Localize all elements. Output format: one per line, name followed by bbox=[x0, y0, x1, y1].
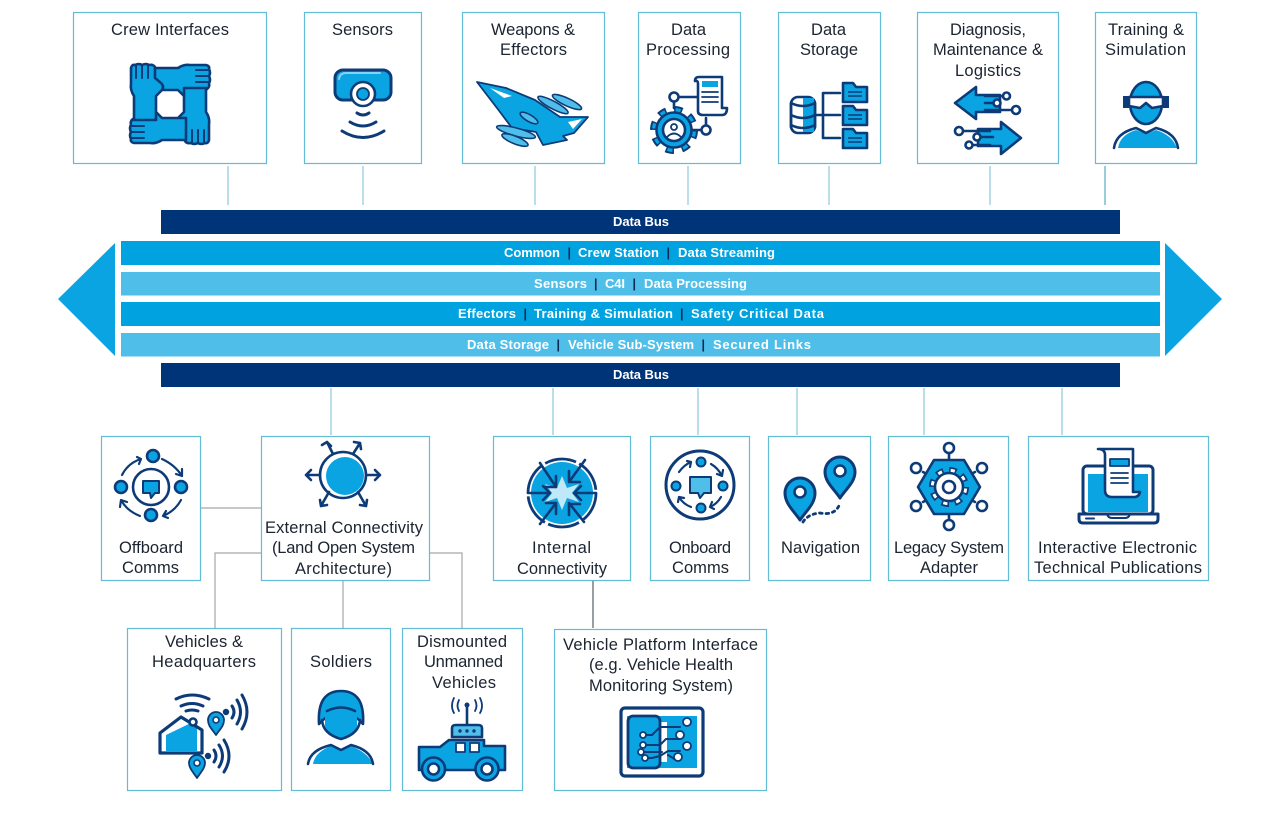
heading: weapons and effectors: Weapons & bbox=[491, 21, 575, 39]
panel: interactive electronic technical publications: Technical Publications bbox=[1034, 559, 1202, 577]
bus band: effectors, training and simulation, safety critical data: | bbox=[680, 307, 684, 321]
heading: offboard comms: Offboard bbox=[119, 539, 183, 557]
bus band: data storage, vehicle sub-system, secured links: Secured Links bbox=[713, 337, 811, 352]
panel: navigation bbox=[768, 436, 870, 580]
icon: person with VR headset bbox=[1114, 82, 1178, 148]
bus band: common, crew station, data streaming: Common bbox=[504, 245, 560, 260]
heading: legacy system adapter: Legacy System bbox=[894, 539, 1004, 557]
bus band: sensors, C4I, data processing: | bbox=[632, 277, 636, 291]
panel: interactive electronic technical publications bbox=[1028, 436, 1208, 580]
panel: diagnosis, maintenance and logistics: Logistics bbox=[955, 62, 1021, 80]
icon: database and folders bbox=[791, 83, 867, 148]
panel: vehicle platform interface: (e.g. Vehicle Health bbox=[589, 656, 733, 674]
panel: offboard comms bbox=[102, 436, 200, 580]
heading: internal connectivity: Internal bbox=[532, 539, 591, 557]
data bus: bottom: Data Bus bbox=[613, 367, 669, 382]
heading: vehicles and headquarters: Vehicles & bbox=[165, 633, 243, 651]
heading: data storage: Data bbox=[811, 21, 847, 39]
panel: dismounted unmanned vehicles: Unmanned bbox=[424, 653, 503, 671]
heading: training and simulation: Training & bbox=[1108, 21, 1184, 39]
panel: diagnosis, maintenance and logistics: Maintenance & bbox=[933, 41, 1043, 59]
connector lines: upper modules to data bus bbox=[228, 166, 1105, 205]
panel: data processing: Processing bbox=[646, 41, 730, 59]
heading: data processing: Data bbox=[671, 21, 707, 39]
bus band: effectors, training and simulation, safety critical data: Training & Simulation bbox=[534, 306, 673, 321]
icon: building with wireless signals and pins bbox=[160, 695, 247, 778]
heading: sensors: Sensors bbox=[332, 21, 393, 39]
bus band: effectors, training and simulation, safety critical data: Effectors bbox=[458, 306, 516, 321]
heading: external connectivity: External Connectivity bbox=[265, 519, 424, 537]
bus band: common, crew station, data streaming: | bbox=[666, 246, 670, 260]
icon: circle with outward arrows bbox=[306, 442, 380, 506]
panel: internal connectivity: Connectivity bbox=[517, 560, 608, 578]
bus band: data storage, vehicle sub-system, secured links: | bbox=[556, 338, 560, 352]
heading: soldiers: Soldiers bbox=[310, 653, 372, 671]
bus band: data storage, vehicle sub-system, secured links bbox=[121, 333, 1160, 356]
data bus: top: Data Bus bbox=[613, 214, 669, 229]
left arrow head bbox=[58, 243, 115, 356]
heading: crew interfaces: Crew Interfaces bbox=[111, 21, 229, 39]
panel: vehicles and headquarters bbox=[128, 628, 282, 790]
icon: segmented circle with inward arrows bbox=[528, 459, 596, 527]
panel: weapons and effectors: Effectors bbox=[500, 41, 567, 59]
right arrow head bbox=[1165, 243, 1222, 356]
panel: training and simulation: Simulation bbox=[1105, 41, 1186, 59]
bus band: sensors, C4I, data processing: | bbox=[594, 277, 598, 291]
data bus: bottom bbox=[161, 363, 1120, 387]
heading: diagnosis, maintenance and logistics: Diagnosis, bbox=[950, 21, 1026, 39]
panel: onboard comms bbox=[650, 436, 750, 580]
bus band: sensors, C4I, data processing: C4I bbox=[605, 276, 625, 291]
panel: dismounted unmanned vehicles: Vehicles bbox=[432, 674, 496, 692]
heading: dismounted unmanned vehicles: Dismounted bbox=[417, 633, 507, 651]
icon: circuit arrows bbox=[955, 87, 1021, 154]
data bus: top bbox=[161, 210, 1120, 234]
panel: offboard comms: Comms bbox=[122, 559, 179, 577]
bus band: common, crew station, data streaming: Crew Station bbox=[578, 245, 659, 260]
icon: offboard communication cycle bbox=[115, 450, 187, 521]
icon: hexagon gear with nodes bbox=[911, 443, 987, 530]
panel: vehicle platform interface bbox=[554, 630, 766, 790]
heading: navigation: Navigation bbox=[781, 539, 860, 557]
heading: onboard comms: Onboard bbox=[669, 539, 731, 557]
icon: sensor with waves bbox=[335, 70, 391, 138]
icon: laptop with document bbox=[1079, 449, 1158, 523]
heading: vehicle platform interface: Vehicle Platform Interface bbox=[563, 636, 758, 654]
icon: gear, person and document bbox=[654, 77, 727, 150]
bus band: effectors, training and simulation, safety critical data bbox=[121, 302, 1160, 326]
panel: onboard comms: Comms bbox=[672, 559, 729, 577]
bus band: sensors, C4I, data processing: Data Processing bbox=[644, 276, 747, 291]
panel: diagnosis, maintenance and logistics bbox=[918, 12, 1058, 164]
panel: dismounted unmanned vehicles bbox=[402, 628, 522, 790]
bus band: data storage, vehicle sub-system, secured links: | bbox=[702, 338, 705, 352]
bus band: data storage, vehicle sub-system, secured links: Vehicle Sub-System bbox=[568, 337, 694, 352]
panel: external connectivity bbox=[262, 436, 430, 580]
panel: legacy system adapter bbox=[888, 436, 1008, 580]
icon: soldier with helmet bbox=[308, 691, 373, 764]
panel: crew interfaces bbox=[74, 12, 266, 164]
heading: interactive electronic technical publications: Interactive Electronic bbox=[1038, 539, 1197, 557]
icon: circuit board bbox=[621, 708, 703, 776]
panel: training and simulation bbox=[1096, 12, 1196, 164]
icon: onboard communication cycle bbox=[666, 451, 734, 519]
bus band: common, crew station, data streaming bbox=[121, 241, 1160, 265]
panel: vehicles and headquarters: Headquarters bbox=[152, 653, 256, 671]
panel: legacy system adapter: Adapter bbox=[920, 559, 978, 577]
icon: location pins with dotted route bbox=[785, 457, 855, 522]
bus band: effectors, training and simulation, safety critical data: | bbox=[524, 307, 527, 321]
connector lines: data bus to lower modules bbox=[331, 388, 1062, 435]
panel: data storage bbox=[778, 12, 880, 164]
bus band: sensors, C4I, data processing bbox=[121, 272, 1160, 296]
panel: data processing bbox=[638, 12, 740, 164]
panel: internal connectivity bbox=[494, 436, 630, 580]
bus band: sensors, C4I, data processing: Sensors bbox=[534, 276, 587, 291]
panel: data storage: Storage bbox=[800, 41, 858, 59]
bus band: common, crew station, data streaming: | bbox=[568, 246, 571, 260]
icon: fighter jet with missiles bbox=[477, 82, 588, 149]
panel: external connectivity: Architecture) bbox=[295, 560, 392, 578]
panel: vehicle platform interface: Monitoring System) bbox=[589, 677, 733, 695]
panel: weapons and effectors bbox=[462, 12, 604, 164]
panel: sensors bbox=[304, 12, 422, 164]
panel: soldiers bbox=[292, 628, 390, 790]
bus band: common, crew station, data streaming: Data Streaming bbox=[678, 245, 775, 260]
panel: external connectivity: (Land Open System bbox=[272, 539, 415, 557]
bus band: effectors, training and simulation, safety critical data: Safety Critical Data bbox=[691, 306, 825, 321]
icon: four hands linked bbox=[130, 64, 210, 144]
bus band: data storage, vehicle sub-system, secured links: Data Storage bbox=[467, 337, 549, 352]
icon: armoured vehicle with antenna bbox=[419, 698, 505, 780]
connector lines: external connectivity branches bbox=[201, 508, 593, 628]
